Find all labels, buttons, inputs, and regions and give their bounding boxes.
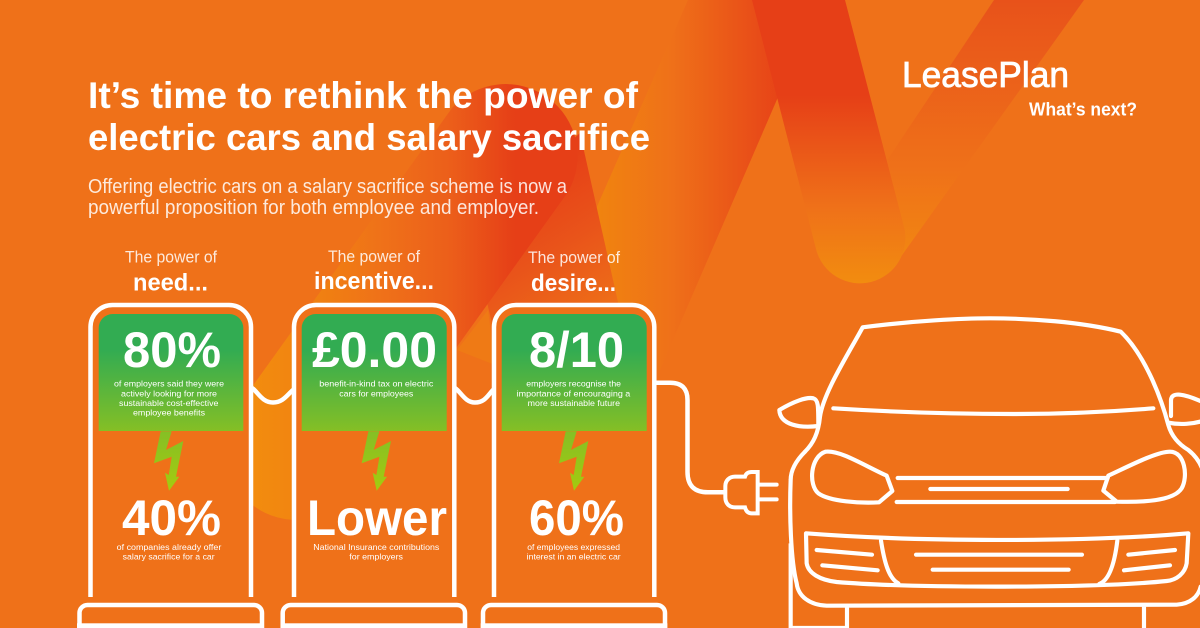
wheels bbox=[791, 543, 1144, 628]
panel: power of desire bbox=[481, 248, 667, 628]
car lower body bbox=[790, 452, 1200, 606]
stat: 8/10: 8/10 bbox=[529, 322, 624, 378]
intro text: Offering electric cars on a salary sacrifice scheme is now a bbox=[88, 176, 568, 198]
car illustration bbox=[779, 318, 1200, 628]
title: It’s time to rethink the power of bbox=[88, 75, 639, 116]
icon: lightning bolt bbox=[362, 431, 391, 491]
logo: LeasePlan: What’s next? bbox=[1029, 100, 1137, 120]
stat description: of companies already offer bbox=[117, 542, 221, 552]
icon: lightning bolt bbox=[154, 431, 183, 491]
title bbox=[88, 75, 650, 158]
stat description: more sustainable future bbox=[528, 398, 620, 408]
pump outline bbox=[90, 305, 251, 597]
stat: 40%: 40% bbox=[122, 490, 221, 546]
heading: need bbox=[125, 248, 217, 296]
heading: need: need... bbox=[133, 270, 208, 296]
right headlight bbox=[1103, 452, 1185, 502]
left mirror bbox=[779, 398, 818, 427]
stat: 60%: 60% bbox=[529, 490, 624, 546]
stat description: benefit-in-kind tax on electric bbox=[319, 379, 434, 389]
stat: 80%: 80% bbox=[123, 322, 221, 378]
base line bbox=[481, 623, 667, 628]
pump base bbox=[80, 605, 262, 628]
bumper dividers bbox=[881, 541, 1117, 584]
stat description bbox=[313, 542, 439, 562]
pump base bbox=[483, 605, 665, 628]
stat: Lower: Lower bbox=[307, 490, 447, 546]
stat description: employee benefits bbox=[133, 408, 205, 418]
logo: LeasePlan bbox=[902, 54, 1137, 120]
intro text bbox=[88, 176, 568, 219]
panel: power of incentive bbox=[280, 247, 467, 628]
stat description bbox=[517, 379, 631, 408]
stat description bbox=[114, 379, 224, 418]
heading: incentive: incentive... bbox=[314, 268, 434, 295]
heading: incentive bbox=[314, 247, 434, 295]
hood line bbox=[833, 408, 1153, 414]
stat description: of employees expressed bbox=[527, 542, 620, 552]
pump base bbox=[283, 605, 465, 628]
bumper slats bbox=[817, 550, 1175, 570]
heading: desire bbox=[528, 248, 620, 297]
bumper bbox=[806, 533, 1188, 587]
cable from pump to plug bbox=[656, 383, 724, 492]
panel: power of need bbox=[77, 248, 264, 628]
intro text: powerful proposition for both employee and employer. bbox=[88, 197, 539, 219]
base line bbox=[77, 623, 264, 628]
stat description: employers recognise the bbox=[526, 379, 621, 389]
title: electric cars and salary sacrifice bbox=[88, 117, 650, 158]
stat description: sustainable cost-effective bbox=[119, 398, 219, 408]
heading: need: The power of bbox=[125, 248, 217, 266]
stat description bbox=[319, 379, 434, 398]
heading: desire: The power of bbox=[528, 248, 620, 267]
green stat panel bbox=[302, 314, 447, 431]
right mirror bbox=[1168, 395, 1200, 424]
stat description: National Insurance contributions bbox=[313, 542, 439, 552]
stat description: importance of encouraging a bbox=[517, 388, 631, 398]
icon: lightning bolt bbox=[559, 431, 588, 491]
stat description: actively looking for more bbox=[121, 388, 217, 398]
green stat panel bbox=[502, 314, 647, 431]
stat description: of employers said they were bbox=[114, 379, 224, 389]
heading: incentive: The power of bbox=[328, 247, 420, 266]
grille bars bbox=[897, 478, 1115, 502]
stat description bbox=[117, 542, 221, 562]
heading: desire: desire... bbox=[531, 270, 616, 297]
stat description: salary sacrifice for a car bbox=[123, 552, 215, 562]
green stat panel bbox=[99, 314, 243, 431]
stat description: interest in an electric car bbox=[527, 552, 621, 562]
stat: £0.00: £0.00 bbox=[312, 322, 437, 378]
stat description: for employers bbox=[349, 552, 403, 562]
icon: plug bbox=[725, 472, 777, 513]
stat description: cars for employees bbox=[339, 388, 413, 398]
pump outline bbox=[294, 305, 454, 597]
connectors between pumps bbox=[252, 388, 493, 402]
left headlight bbox=[812, 452, 892, 503]
logo: LeasePlan: LeasePlan bbox=[902, 54, 1069, 95]
stat description bbox=[527, 542, 621, 562]
base line bbox=[280, 623, 467, 628]
car body outline bbox=[805, 318, 1200, 480]
pump outline bbox=[494, 305, 654, 597]
